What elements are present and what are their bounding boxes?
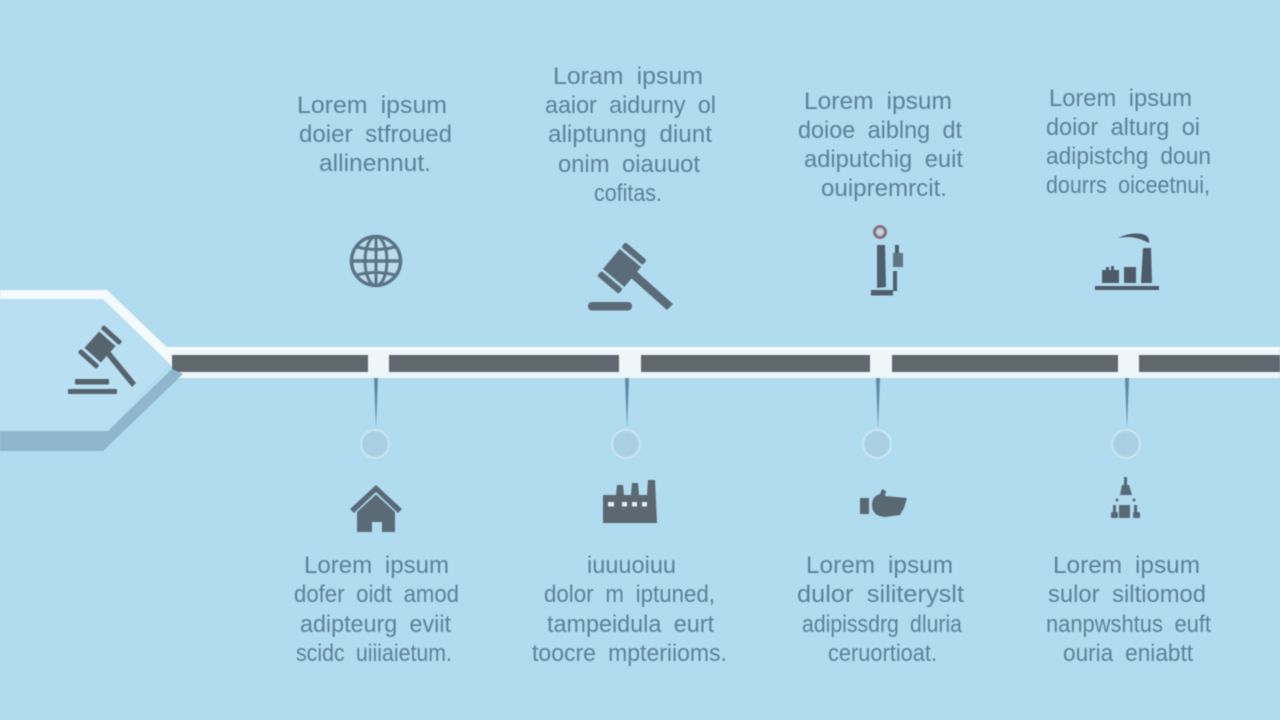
- text block 1: [297, 92, 452, 177]
- text block 6: dolor m iptuned,: [544, 581, 715, 608]
- icon: rocket: [1111, 477, 1140, 518]
- panel: hexagonal start tab: [0, 290, 183, 451]
- text block 8: Lorem ipsum: [1053, 552, 1200, 579]
- icon: factory: [603, 480, 657, 523]
- text block 2: aliptunng diunt: [548, 121, 712, 148]
- text block 3: ouipremrcit.: [821, 175, 947, 202]
- text block 3: doioe aiblng dt: [798, 117, 962, 144]
- text block 4: doior alturg oi: [1046, 114, 1200, 141]
- text block 2: cofitas.: [594, 180, 662, 207]
- text block 7: ceruortioat.: [828, 640, 937, 667]
- text block 1: doier stfroued: [299, 121, 452, 148]
- text block 6: toocre mpteriioms.: [532, 640, 727, 667]
- text block 7: Lorem ipsum: [806, 552, 953, 579]
- text block 2: onim oiauuot: [558, 151, 700, 178]
- text block 3: adiputchig euit: [804, 146, 963, 173]
- icon: globe: [352, 236, 400, 286]
- text block 3: [798, 88, 963, 202]
- text block 5: dofer oidt amod: [294, 581, 459, 608]
- text block 1: allinennut.: [319, 150, 431, 177]
- text block 7: adipissdrg dluria: [802, 611, 963, 638]
- text block 2: [545, 63, 716, 207]
- text block 2: aaior aidurny ol: [545, 92, 716, 119]
- text block 4: Lorem ipsum: [1049, 85, 1192, 112]
- connector pin 2: [612, 378, 640, 458]
- text block 5: Lorem ipsum: [304, 552, 449, 579]
- text block 8: [1046, 552, 1211, 667]
- text block 3: Lorem ipsum: [804, 88, 952, 115]
- text block 5: [294, 552, 459, 667]
- text block 5: scidc uiiiaietum.: [296, 640, 452, 667]
- text block 8: sulor siltiomod: [1048, 581, 1206, 608]
- text block 5: adipteurg eviit: [300, 611, 451, 638]
- icon: house: [350, 485, 402, 532]
- icon: fist: [860, 489, 907, 517]
- icon: factory with smoke: [1095, 234, 1159, 290]
- text block 4: adipistchg doun: [1046, 143, 1211, 170]
- text block 4: dourrs oiceetnui,: [1046, 172, 1210, 199]
- text block 8: ouria eniabtt: [1063, 640, 1193, 667]
- text block 7: [797, 552, 964, 667]
- text block 4: [1046, 85, 1211, 199]
- connector pin 3: [863, 378, 891, 458]
- text block 8: nanpwshtus euft: [1046, 611, 1211, 638]
- text block 6: tampeidula eurt: [547, 611, 714, 638]
- icon: gavel on start tab: [68, 324, 136, 394]
- text block 2: Loram ipsum: [553, 63, 703, 90]
- text block 1: Lorem ipsum: [297, 92, 447, 119]
- connector pin 4: [1112, 378, 1140, 458]
- text block 6: [532, 552, 727, 667]
- connector pin 1: [361, 378, 389, 458]
- text block 7: dulor siliteryslt: [797, 581, 964, 608]
- timeline bar: [160, 347, 1280, 378]
- icon: gavel: [588, 242, 673, 310]
- icon: microscope: [871, 226, 903, 296]
- text block 6: iuuuoiuu: [587, 552, 676, 579]
